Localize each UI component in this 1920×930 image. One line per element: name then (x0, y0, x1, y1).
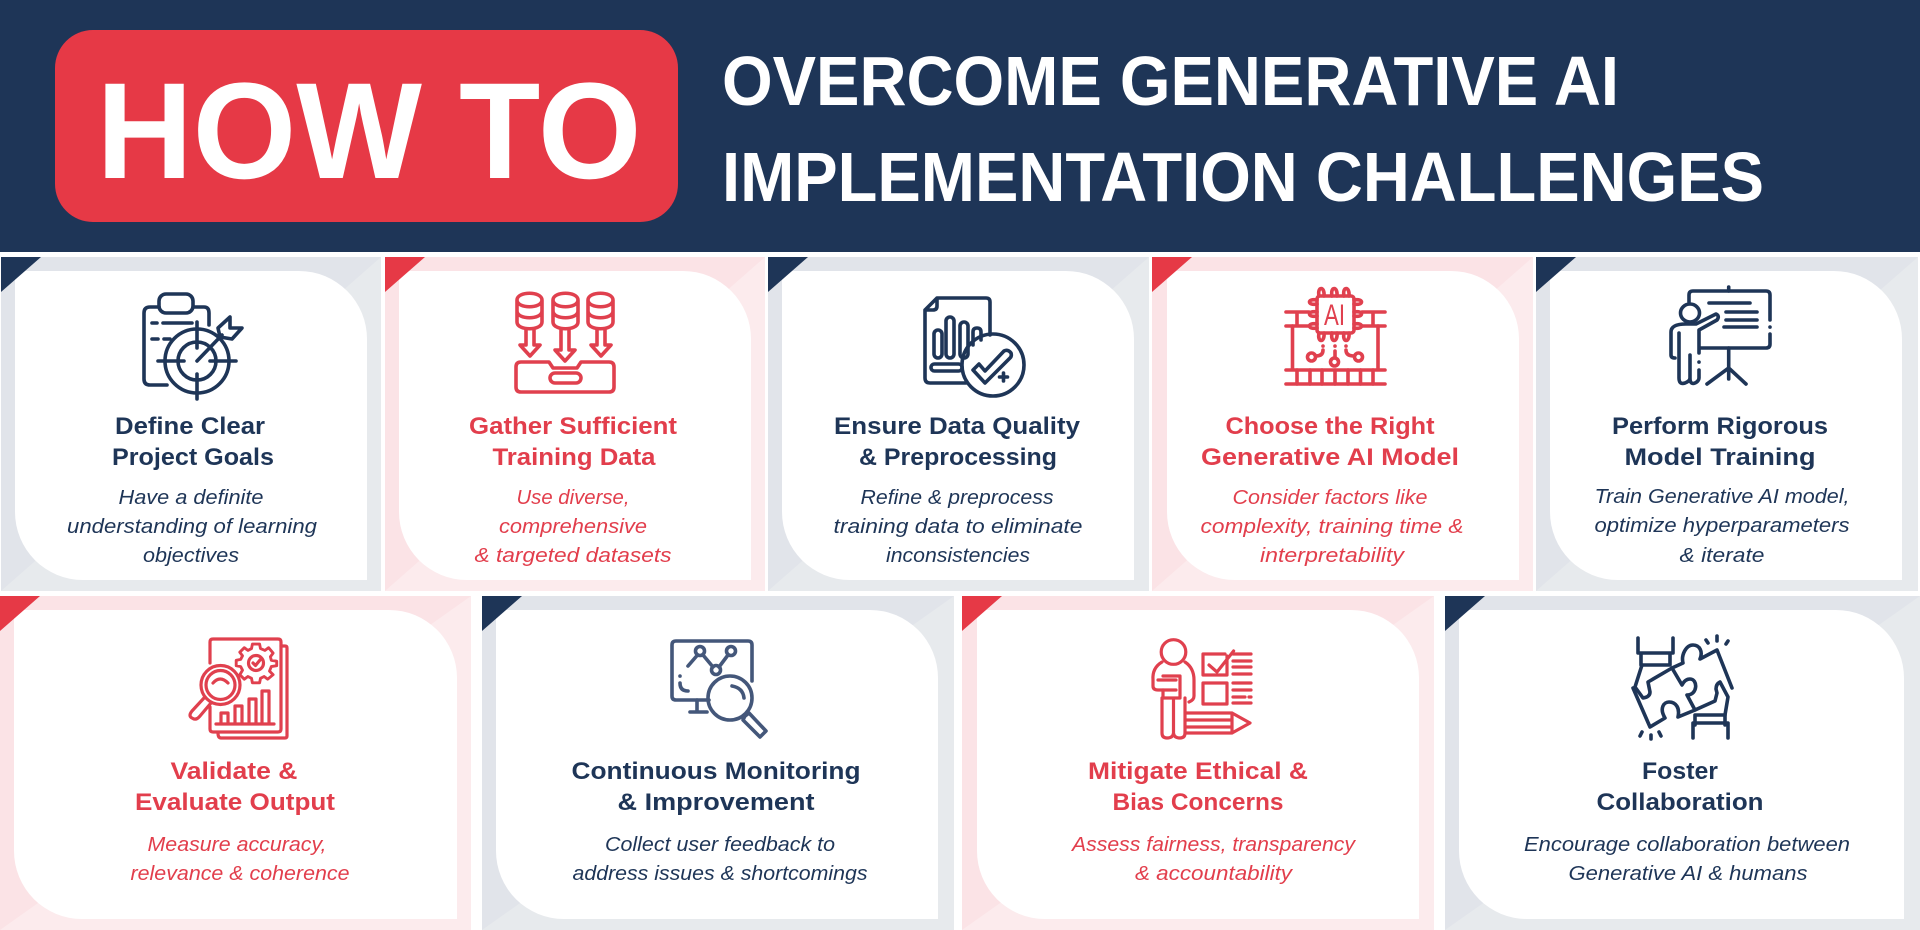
text block (834, 487, 1082, 567)
heading: Evaluate Output (135, 789, 335, 816)
heading (112, 413, 274, 471)
icon: AI chip on film strip (1286, 288, 1385, 384)
heading: Training Data (492, 444, 656, 471)
text block: Generative AI & humans (1568, 863, 1808, 885)
text block (67, 487, 317, 567)
panel: define clear project goals (1, 257, 381, 591)
text block: Encourage collaboration between (1524, 834, 1850, 856)
icon: report with magnifier (190, 639, 287, 738)
text block: Refine & preprocess (860, 487, 1054, 509)
panel: mitigate ethical and bias concerns (962, 596, 1434, 930)
heading (469, 413, 677, 471)
heading: Generative AI Model (1201, 444, 1459, 471)
text block: Assess fairness, transparency (1071, 834, 1356, 856)
heading: Choose the Right (1226, 413, 1434, 440)
icon: document with check (925, 298, 1024, 396)
text block: interpretability (1260, 545, 1405, 567)
text block (1071, 834, 1356, 885)
heading (1088, 758, 1308, 816)
heading: Define Clear (115, 413, 265, 440)
heading (834, 413, 1080, 471)
heading (1612, 413, 1828, 471)
heading: Project Goals (112, 444, 274, 471)
text block: objectives (143, 545, 239, 567)
title: IMPLEMENTATION CHALLENGES (722, 138, 1764, 216)
text block: comprehensive (499, 516, 647, 538)
heading: Collaboration (1596, 789, 1764, 816)
text block: Train Generative AI model, (1594, 486, 1850, 508)
text block: complexity, training time & (1200, 516, 1464, 538)
panel: perform rigorous training (1536, 257, 1918, 591)
title: OVERCOME GENERATIVE AI (722, 42, 1619, 120)
heading: Ensure Data Quality (834, 413, 1080, 440)
panel: ensure data quality (768, 257, 1149, 591)
text block (1200, 487, 1464, 567)
heading (1596, 758, 1764, 816)
text block (130, 834, 350, 885)
panel: validate and evaluate output (0, 596, 471, 930)
heading: & Improvement (618, 789, 814, 816)
text block: Consider factors like (1232, 487, 1428, 509)
heading: Validate & (170, 758, 298, 785)
header band (0, 0, 1920, 252)
text block: & targeted datasets (474, 545, 672, 567)
text block: Collect user feedback to (605, 834, 835, 856)
heading: Model Training (1624, 444, 1816, 471)
text block: relevance & coherence (130, 863, 350, 885)
icon: person with checklist and pencil (1153, 640, 1251, 738)
text block (572, 834, 868, 885)
icon: AI chip on film strip: AI (1324, 299, 1345, 332)
panel: choose the right model (1152, 257, 1533, 591)
icon: clipboard with target (144, 294, 242, 399)
icon: hands joining puzzle (1633, 636, 1732, 739)
text block (1594, 486, 1850, 567)
heading (572, 758, 860, 816)
heading: Foster (1642, 758, 1718, 785)
heading: & Preprocessing (859, 444, 1057, 471)
title (722, 42, 1764, 216)
heading (1201, 413, 1459, 471)
icon: monitor with magnifier (672, 641, 766, 737)
text block (474, 487, 672, 567)
text block: & iterate (1680, 545, 1764, 567)
panel: gather sufficient training data (385, 257, 765, 591)
heading: Gather Sufficient (469, 413, 677, 440)
text block: Have a definite (118, 487, 264, 509)
text block (1524, 834, 1850, 885)
heading: Continuous Monitoring (572, 758, 860, 785)
text block: Use diverse, (516, 487, 630, 509)
heading: Bias Concerns (1112, 789, 1284, 816)
icon: presenter at board (1671, 287, 1770, 384)
icon: databases into tray (516, 293, 614, 392)
text block: optimize hyperparameters (1594, 515, 1850, 537)
heading (135, 758, 335, 816)
text block: Measure accuracy, (148, 834, 326, 856)
panel: continuous monitoring (482, 596, 954, 930)
text block: inconsistencies (886, 545, 1030, 567)
text block: understanding of learning (67, 516, 317, 538)
text block: training data to eliminate (834, 516, 1082, 538)
heading: Perform Rigorous (1612, 413, 1828, 440)
panel: foster collaboration (1445, 596, 1920, 930)
how to badge: HOW TO (96, 55, 642, 208)
heading: Mitigate Ethical & (1088, 758, 1308, 785)
text block: & accountability (1135, 863, 1293, 885)
text block: address issues & shortcomings (572, 863, 868, 885)
